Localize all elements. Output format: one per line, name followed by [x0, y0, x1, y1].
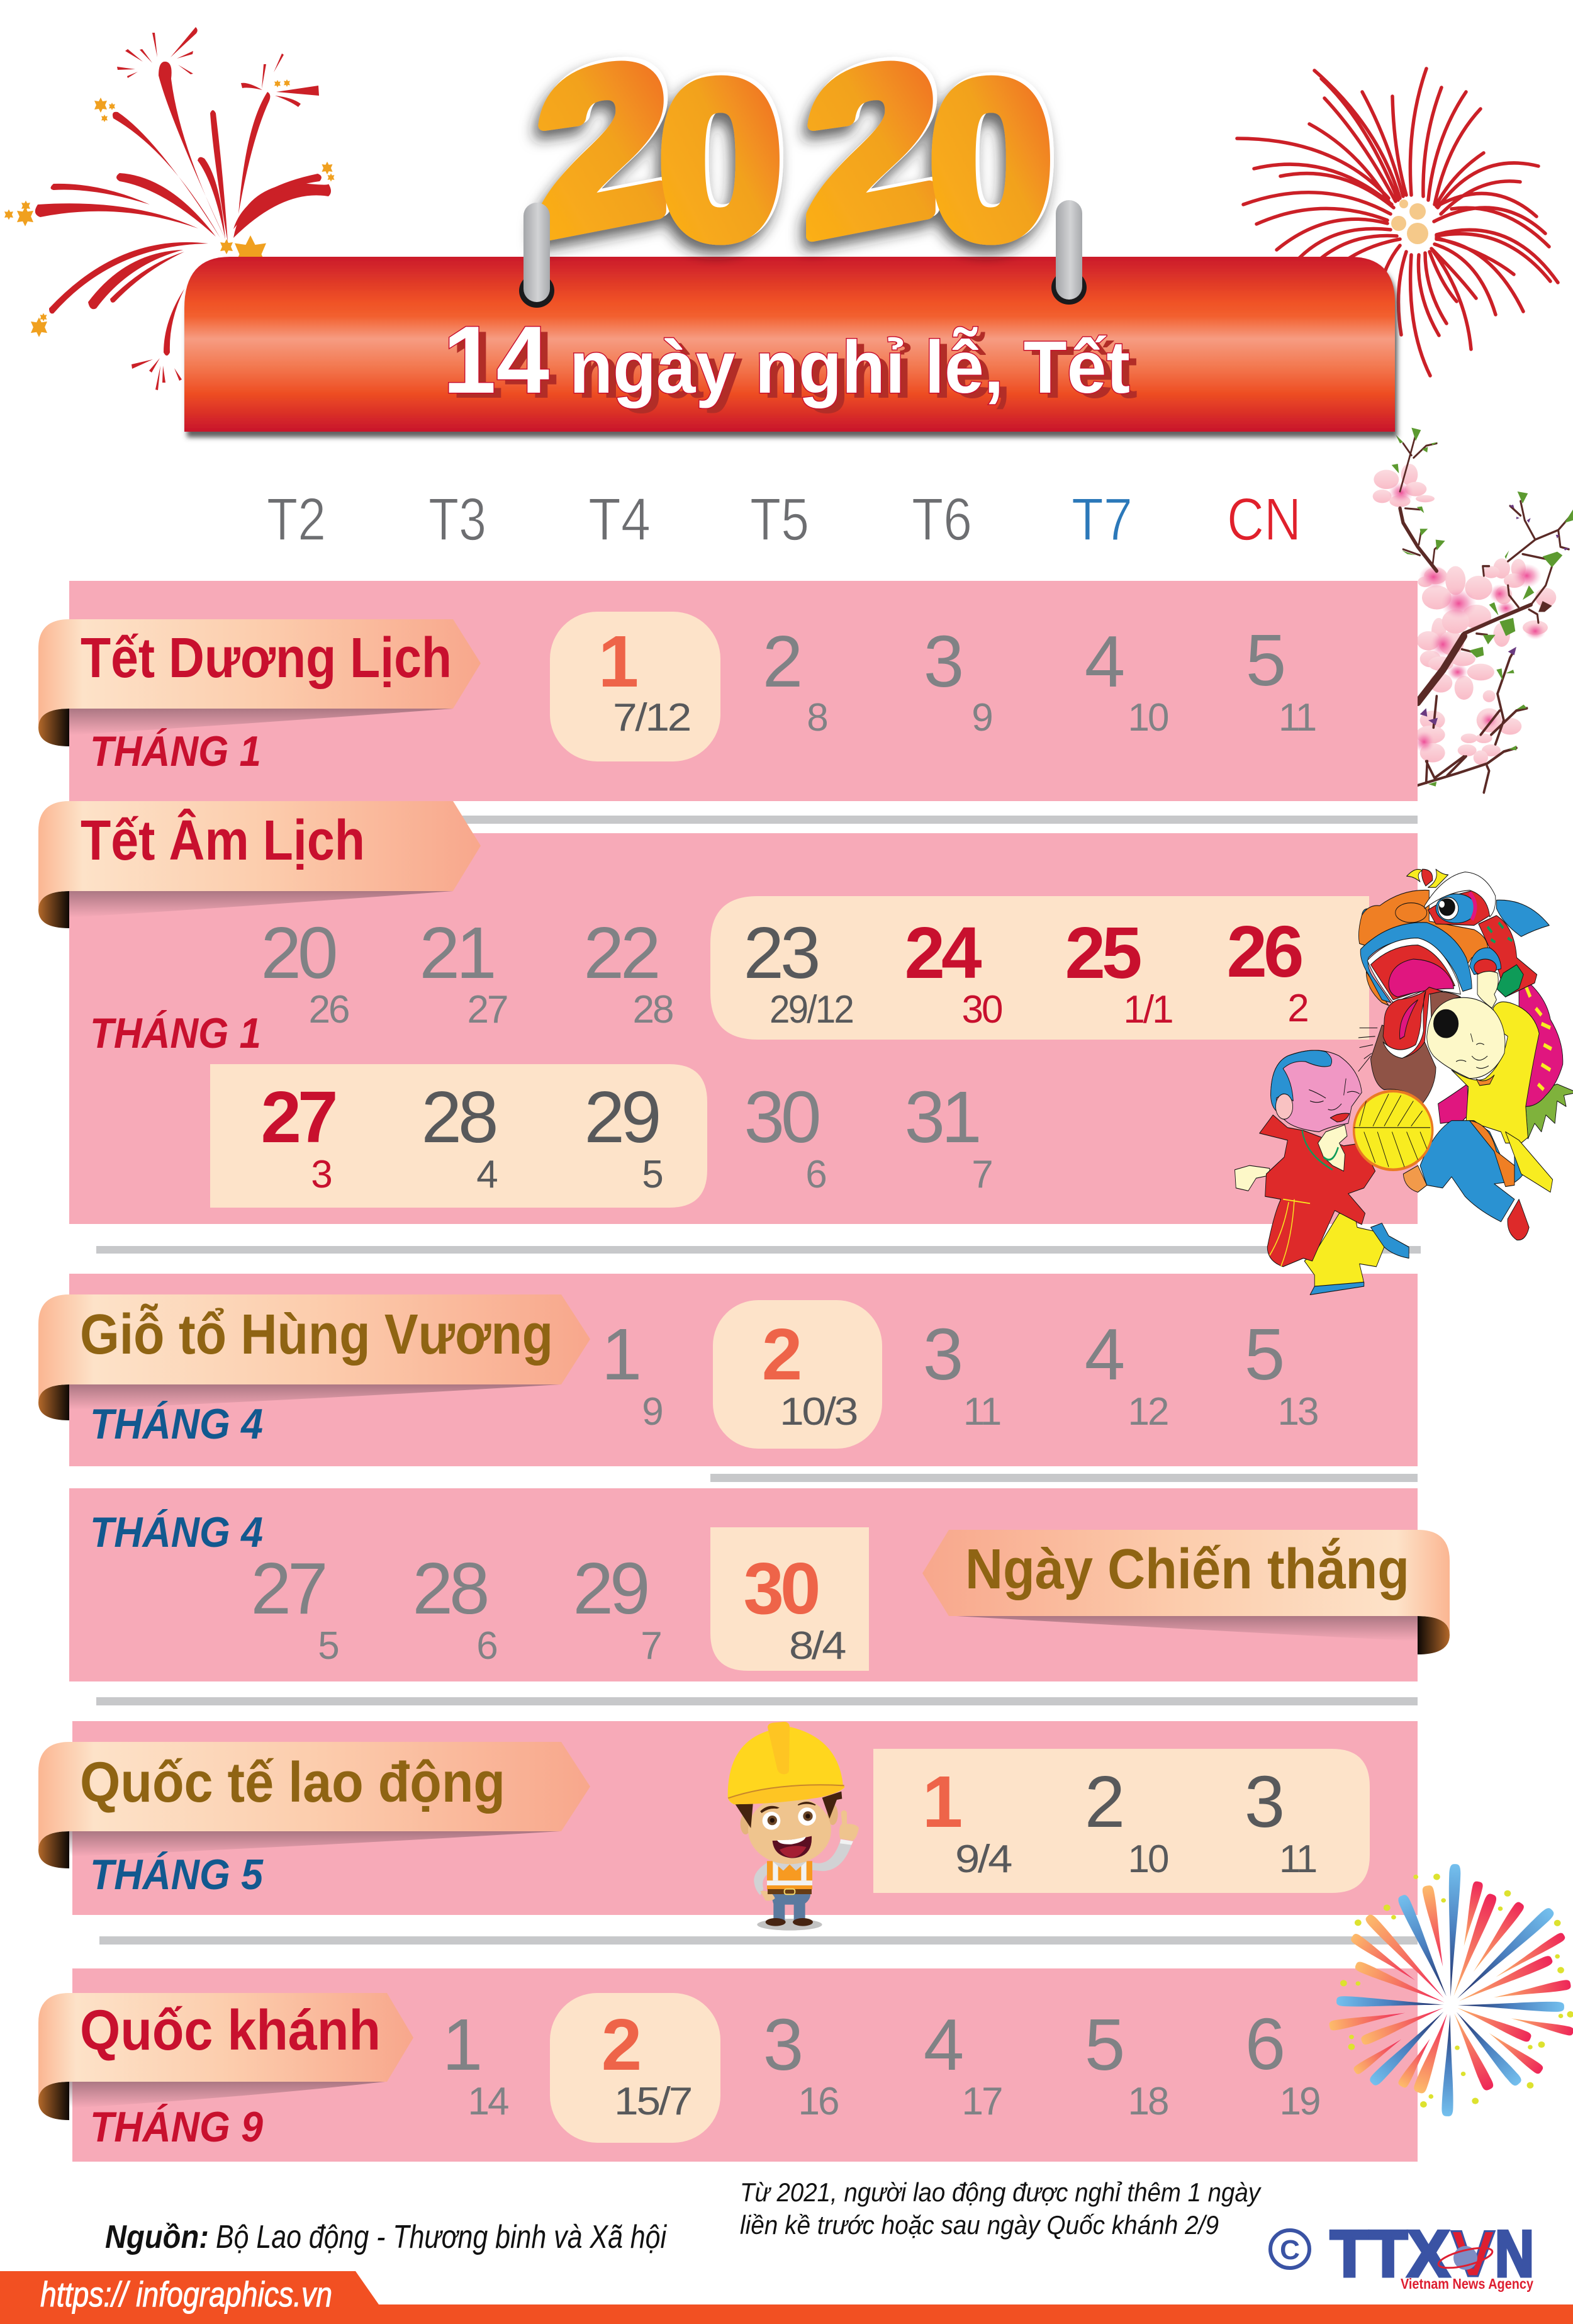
title: 2020: 0	[933, 35, 1055, 281]
weekday header row: T6	[912, 486, 972, 553]
illustration: peach blossom branch	[1373, 428, 1573, 792]
panel: Giỗ tổ Hùng Vương: 3	[923, 1313, 961, 1395]
subtitle: 14 ngày nghỉ lễ, Tết	[443, 306, 1138, 418]
panel: Tết Âm Lịch: 30	[962, 988, 1002, 1031]
panel: Tết Âm Lịch: 6	[805, 1153, 826, 1196]
panel: Ngày Chiến thắng: 27	[250, 1547, 325, 1629]
panel: Giỗ tổ Hùng Vương: 2	[762, 1313, 800, 1395]
panel: Tết Dương Lịch: Tết Dương Lịch	[81, 627, 452, 690]
panel: Tết Âm Lịch: 5	[642, 1153, 662, 1196]
divider line	[96, 1697, 1418, 1705]
panel: Ngày Chiến thắng: 6	[476, 1624, 496, 1668]
panel: Quốc khánh: 6	[1245, 2003, 1283, 2085]
panel: Tết Âm Lịch: 29	[584, 1076, 659, 1158]
panel: Giỗ tổ Hùng Vương: 9	[642, 1390, 662, 1434]
panel: Quốc tế lao động: 10	[1128, 1838, 1168, 1881]
weekday header row	[267, 486, 1301, 553]
panel: Tết Âm Lịch: 26	[1226, 911, 1302, 992]
panel: Quốc khánh: 18	[1128, 2080, 1168, 2123]
panel: Quốc khánh: 19	[1280, 2080, 1319, 2123]
panel: Tết Âm Lịch: Tết Âm Lịch	[81, 808, 365, 872]
footer bar with url	[0, 2271, 1573, 2324]
title: 2020: 2	[809, 8, 941, 280]
panel: Tết Dương Lịch: 1	[598, 620, 637, 702]
panel: Giỗ tổ Hùng Vương: 10/3	[780, 1390, 857, 1434]
panel: Tết Âm Lịch: 22	[583, 912, 658, 994]
weekday header row: T5	[750, 486, 809, 553]
panel: Tết Dương Lịch: 3	[924, 620, 961, 702]
logo: TTXVN Vietnam News Agency: V	[1451, 2218, 1495, 2291]
panel: Ngày Chiến thắng: 29	[573, 1547, 647, 1629]
panel: Tết Âm Lịch: 20	[260, 912, 335, 994]
panel: Ngày Chiến thắng: THÁNG 4	[90, 1508, 263, 1556]
divider line	[459, 816, 1418, 824]
panel: Ngày Chiến thắng: 28	[412, 1547, 487, 1629]
panel: Quốc tế lao động	[38, 1721, 1418, 1915]
copyright mark: C	[1280, 2235, 1300, 2265]
panel: Giỗ tổ Hùng Vương: 13	[1278, 1390, 1318, 1434]
panel: Tết Âm Lịch: 26	[309, 988, 349, 1031]
weekday header row: T3	[428, 486, 486, 553]
weekday header row: T2	[267, 486, 326, 553]
divider line	[710, 1474, 1418, 1482]
panel: Ngày Chiến thắng	[69, 1488, 1450, 1681]
panel: Tết Âm Lịch: 21	[419, 912, 493, 994]
panel: Quốc khánh: 17	[962, 2080, 1002, 2123]
panel: Quốc khánh: Quốc khánh	[80, 1999, 381, 2062]
firework: colourful burst	[1329, 1864, 1573, 2116]
firework: red burst left	[4, 27, 335, 390]
title: 2020	[536, 8, 1055, 283]
panel: Quốc khánh	[38, 1968, 1418, 2162]
footer bar with url: https:// infographics.vn	[40, 2274, 332, 2314]
panel: Quốc khánh: THÁNG 9	[90, 2103, 263, 2151]
panel: Tết Âm Lịch: 29/12	[770, 988, 853, 1031]
panel: Tết Dương Lịch: 9	[971, 696, 992, 739]
subtitle: 14 ngày nghỉ lễ, Tết: ngày nghỉ lễ, Tết	[577, 331, 1138, 414]
firework: red burst right	[1237, 69, 1558, 376]
source line: Bộ Lao động - Thương binh và Xã hội	[216, 2219, 667, 2255]
calendar header bar	[184, 257, 1395, 432]
panel: Giỗ tổ Hùng Vương: 5	[1245, 1313, 1282, 1395]
panel: Tết Âm Lịch: 2	[1287, 987, 1307, 1030]
panel: Tết Âm Lịch: 3	[311, 1153, 331, 1196]
title: 2020: 0	[659, 37, 781, 283]
panel: Tết Âm Lịch: 25	[1065, 912, 1141, 994]
panel: Giỗ tổ Hùng Vương: 4	[1085, 1313, 1124, 1395]
panel: Ngày Chiến thắng: 7	[641, 1624, 661, 1668]
panel: Quốc khánh: 5	[1085, 2004, 1122, 2085]
panel: Tết Dương Lịch: 5	[1246, 619, 1284, 701]
panel: Quốc tế lao động: 3	[1245, 1761, 1282, 1843]
weekday header row: T7	[1072, 486, 1133, 553]
panel: Tết Âm Lịch: 27	[260, 1076, 335, 1158]
note text	[740, 2177, 1262, 2240]
logo: TTXVN Vietnam News Agency: TTX	[1330, 2218, 1450, 2291]
panel: Tết Âm Lịch: 27	[467, 988, 507, 1031]
subtitle: 14 ngày nghỉ lễ, Tết: 14	[443, 306, 549, 413]
panel: Tết Dương Lịch: 8	[807, 696, 827, 739]
panel: Quốc khánh: 2	[602, 2004, 639, 2085]
panel: Ngày Chiến thắng: 5	[318, 1624, 338, 1668]
panel: Quốc khánh: 1	[442, 2004, 479, 2085]
weekday header row: CN	[1227, 486, 1301, 553]
copyright mark	[1270, 2230, 1309, 2268]
panel: Tết Dương Lịch: 7/12	[613, 696, 690, 739]
panel: Quốc tế lao động: 11	[1279, 1838, 1316, 1881]
divider line	[99, 1936, 1418, 1945]
panel: Tết Dương Lịch: 2	[763, 620, 800, 702]
panel: Tết Âm Lịch: THÁNG 1	[90, 1009, 261, 1057]
note text: liền kề trước hoặc sau ngày Quốc khánh 2/9	[740, 2210, 1219, 2240]
panel: Tết Dương Lịch	[38, 581, 1418, 801]
panel: Tết Dương Lịch: 4	[1085, 620, 1124, 702]
panel: Tết Âm Lịch: 28	[633, 988, 673, 1031]
title: 2020: 0	[663, 35, 785, 281]
panel: Tết Âm Lịch: 4	[476, 1153, 497, 1196]
panel: Quốc tế lao động: 1	[922, 1761, 961, 1843]
panel: Tết Âm Lịch: 1/1	[1123, 988, 1172, 1031]
panel: Tết Dương Lịch: 11	[1279, 696, 1316, 739]
panel: Giỗ tổ Hùng Vương	[38, 1274, 1418, 1466]
logo: TTXVN Vietnam News Agency: N	[1495, 2218, 1534, 2291]
note text: Từ 2021, người lao động được nghỉ thêm 1 ngày	[740, 2177, 1262, 2207]
panel: Tết Âm Lịch: 28	[421, 1076, 496, 1158]
panel: Ngày Chiến thắng: Ngày Chiến thắng	[965, 1537, 1409, 1601]
panel: Quốc tế lao động: 9/4	[955, 1838, 1012, 1881]
panel: Tết Âm Lịch: 7	[971, 1153, 992, 1196]
illustration: construction worker	[728, 1722, 859, 1931]
panel: Giỗ tổ Hùng Vương: Giỗ tổ Hùng Vương	[80, 1303, 553, 1366]
panel: Quốc tế lao động: THÁNG 5	[90, 1851, 264, 1899]
logo: TTXVN Vietnam News Agency	[1330, 2218, 1534, 2292]
panel: Tết Âm Lịch: 24	[904, 912, 982, 994]
panel: Giỗ tổ Hùng Vương: 1	[602, 1313, 639, 1395]
panel: Giỗ tổ Hùng Vương: THÁNG 4	[90, 1400, 263, 1448]
title: 2020: 2	[536, 11, 668, 283]
panel: Quốc khánh: 16	[798, 2080, 838, 2123]
panel: Tết Âm Lịch: 31	[904, 1076, 978, 1158]
panel: Ngày Chiến thắng: 30	[743, 1547, 818, 1629]
panel: Tết Dương Lịch: 10	[1128, 696, 1168, 739]
subtitle: 14 ngày nghỉ lễ, Tết: 14	[451, 312, 557, 418]
illustration: lion dance children	[1234, 869, 1573, 1294]
panel: Ngày Chiến thắng: 8/4	[789, 1624, 846, 1668]
panel: Quốc tế lao động: 2	[1085, 1761, 1122, 1843]
panel: Quốc khánh: 3	[763, 2004, 801, 2085]
panel: Tết Dương Lịch: THÁNG 1	[90, 727, 261, 775]
logo: TTXVN Vietnam News Agency: Vietnam News Agency	[1401, 2276, 1533, 2292]
panel: Giỗ tổ Hùng Vương: 12	[1128, 1390, 1168, 1434]
panel: Quốc tế lao động: Quốc tế lao động	[80, 1751, 505, 1814]
divider line	[96, 1246, 1421, 1254]
title: 2020: 2	[539, 8, 672, 280]
panel: Quốc khánh: 15/7	[614, 2080, 691, 2123]
subtitle: 14 ngày nghỉ lễ, Tết: ngày nghỉ lễ, Tết	[569, 326, 1130, 409]
panel: Giỗ tổ Hùng Vương: 11	[963, 1390, 1000, 1434]
source line	[105, 2219, 667, 2255]
calendar rings	[519, 200, 1087, 308]
panel: Quốc khánh: 4	[924, 2004, 963, 2085]
panel: Tết Âm Lịch: 30	[744, 1076, 819, 1158]
title: 2020: 2	[805, 11, 938, 283]
weekday header row: T4	[588, 486, 651, 553]
source line: Nguồn:	[105, 2219, 209, 2255]
panel: Quốc khánh: 14	[468, 2080, 508, 2123]
panel: Tết Âm Lịch	[38, 801, 1418, 1224]
panel: Tết Âm Lịch: 23	[743, 912, 818, 994]
title: 2020: 0	[930, 37, 1052, 283]
